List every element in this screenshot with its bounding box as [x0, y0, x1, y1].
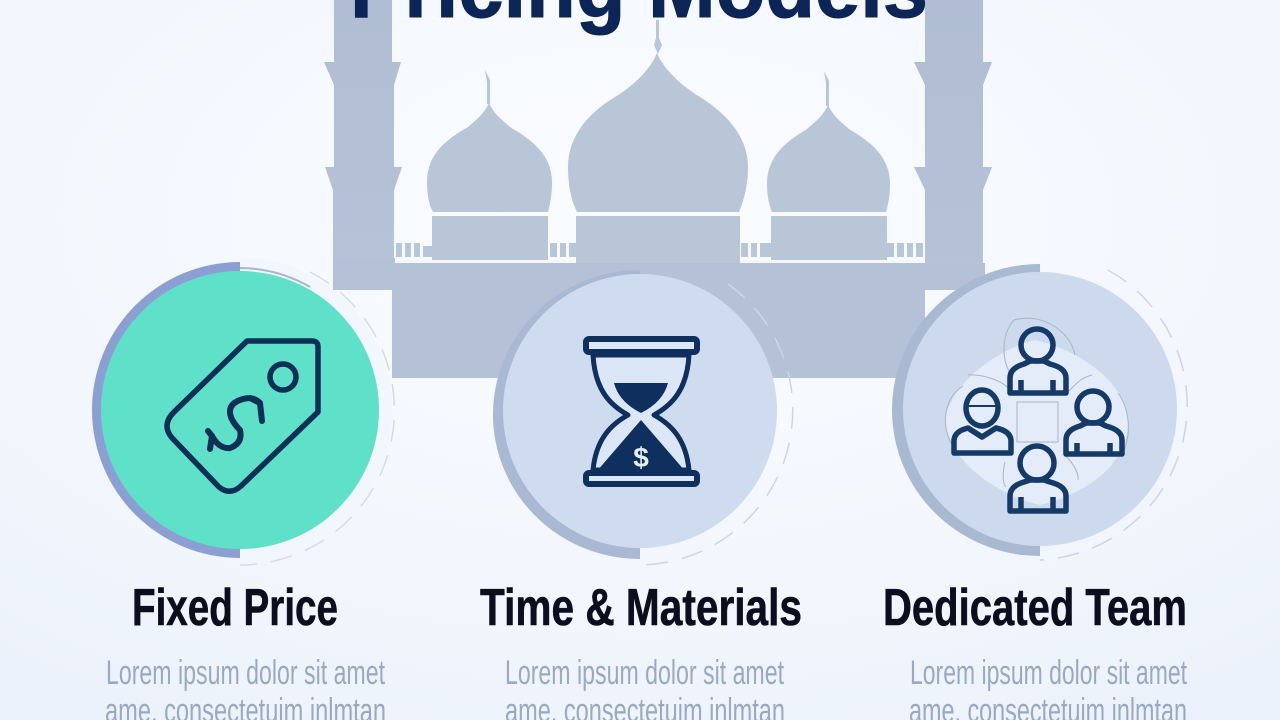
heading: fixed price: Fixed Price: [132, 579, 338, 637]
mosque silhouette: [324, 0, 992, 378]
left minaret: [324, 0, 402, 262]
person left: [954, 390, 1011, 453]
card: dedicated team circle: [892, 264, 1187, 560]
card: fixed price circle: [92, 258, 394, 565]
dashed ring: [1040, 270, 1187, 560]
cornice lines: [395, 260, 922, 263]
body text: time and materials: Lorem ipsum dolor sit amet: [505, 654, 784, 692]
backing arc: [493, 270, 640, 559]
top edge line: [240, 268, 310, 287]
base wall: [333, 258, 985, 378]
connector lines: [945, 318, 1128, 487]
pale disc: [503, 274, 777, 548]
body text: fixed price: Lorem ipsum dolor sit amet: [106, 654, 385, 692]
left dome: [427, 70, 552, 260]
dollar sign: $: [633, 442, 649, 473]
person top: [1010, 329, 1066, 393]
body text: time and materials: [505, 654, 785, 720]
right dome: [767, 71, 890, 260]
person bottom: [1010, 446, 1066, 511]
body text: dedicated team: [909, 654, 1187, 720]
person right: [1066, 391, 1122, 454]
heading: dedicated team: Dedicated Team: [883, 579, 1187, 637]
icon: team: [954, 329, 1122, 511]
heading: time and materials: Time & Materials: [480, 579, 802, 637]
halo: [240, 258, 392, 562]
dashed ring: [240, 272, 394, 565]
network blob: [945, 340, 1128, 505]
teal disc: [101, 271, 379, 549]
pale disc: [903, 272, 1177, 546]
backing arc: [92, 262, 240, 558]
icon: price tag: [167, 341, 318, 491]
dashed ring: [640, 284, 793, 565]
body text: fixed price: [105, 654, 386, 720]
card: time and materials circle: [493, 270, 793, 565]
balustrades: [396, 243, 923, 257]
backing arc: [892, 264, 1040, 556]
icon: hourglass: [586, 339, 697, 484]
right minaret: [914, 0, 992, 285]
central dome: [568, 20, 748, 266]
